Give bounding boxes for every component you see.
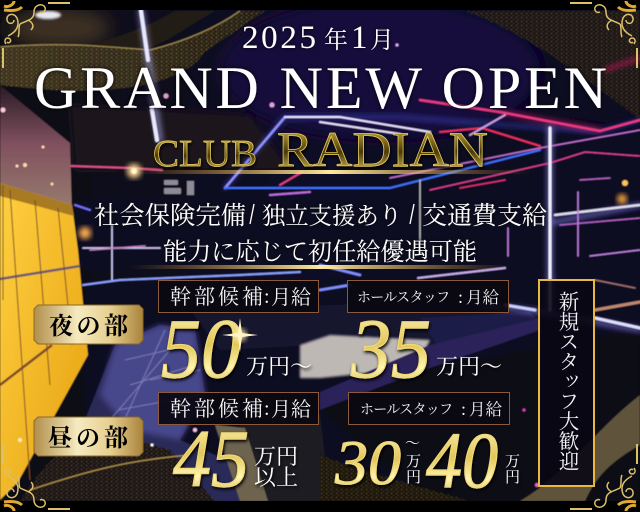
ornament top left (3, 1, 70, 68)
salary night staff: 万円〜 (436, 354, 502, 379)
date: 月 (370, 28, 394, 54)
label day: 昼の部 (48, 425, 128, 452)
box day executive: 幹部候補 (170, 397, 263, 421)
benefits text (94, 202, 547, 266)
salary day staff range: 円 (505, 469, 520, 486)
box day hall staff: : (461, 399, 466, 419)
salary day executive (173, 413, 298, 504)
box day executive: : (264, 398, 270, 420)
salary night staff (350, 302, 502, 396)
lower room (76, 200, 546, 270)
gold divider lower (130, 265, 510, 269)
date: 2025 (242, 20, 316, 56)
label day (34, 417, 143, 456)
amber top strip of wall (0, 183, 74, 216)
salary day staff range: 万 (505, 454, 520, 470)
box night executive: 幹部候補 (170, 285, 263, 309)
box night executive (158, 280, 318, 312)
sofa seat (190, 300, 530, 350)
salary night executive: 50 (161, 302, 241, 396)
sparkle (222, 318, 258, 352)
label night (34, 305, 143, 344)
club name logo: CLUB (153, 133, 257, 175)
box night executive: : (264, 286, 270, 308)
ornament bottom right (570, 444, 637, 511)
date: 年 (324, 27, 348, 54)
salary day executive: 万円 (254, 444, 298, 469)
ceiling band grey (70, 105, 290, 170)
neon lines (71, 11, 640, 330)
box night hall staff (348, 280, 508, 312)
marble floor (40, 325, 255, 501)
label night: 夜の部 (49, 313, 128, 340)
salary day executive: 以上 (254, 465, 298, 490)
ornament top right (570, 1, 637, 68)
ornament bottom left (3, 444, 70, 511)
box night hall staff: 月給 (466, 288, 500, 307)
glitter ribbon right (465, 11, 640, 120)
box day executive: 月給 (271, 398, 311, 421)
top black bar (0, 0, 640, 10)
gold wall (0, 183, 88, 500)
salary day staff range: 〜 (405, 436, 420, 452)
box night hall staff: ホールスタッフ (357, 290, 450, 306)
gold divider upper (130, 170, 530, 174)
benefits text: 独立支援あり (262, 203, 402, 230)
salary night executive (161, 302, 312, 396)
benefits text: 交通費支給 (422, 202, 547, 230)
box day hall staff: ホールスタッフ (360, 402, 453, 418)
date (242, 20, 394, 56)
lower floor dark with glitter (20, 430, 215, 501)
sofa right (320, 330, 640, 512)
benefits text: 社会保険完備 (94, 202, 246, 230)
box day hall staff: 月給 (469, 400, 502, 419)
salary day staff range: 30 (334, 427, 401, 498)
box night hall staff: : (458, 287, 463, 307)
date: 1 (351, 20, 368, 56)
black leather sofa bottom (240, 415, 330, 501)
salary day staff range (334, 418, 520, 505)
salary night executive: 万円〜 (246, 354, 312, 379)
salary day executive: 45 (173, 413, 249, 504)
wall seams (0, 185, 80, 480)
vertical welcome box: 新規スタッフ大歓迎 (555, 291, 579, 471)
salary day staff range: 円 (406, 469, 421, 486)
bottom black bar (0, 501, 640, 512)
box day hall staff (348, 392, 510, 424)
white table (300, 335, 430, 378)
club name logo (153, 121, 488, 177)
bottom right gold ribbon (520, 395, 640, 501)
box night executive: 月給 (271, 286, 311, 309)
club name logo: RADIAN (277, 121, 488, 177)
salary day staff range: 万 (406, 454, 421, 470)
ceiling fixture (164, 180, 194, 195)
salary day staff range: 40 (426, 418, 498, 505)
glow under spotlight (10, 8, 110, 48)
benefits text: 能力に応じて初任給優遇可能 (163, 238, 477, 266)
box day executive (158, 392, 318, 424)
ceiling glitter ribbon left (0, 11, 265, 91)
vertical welcome box (539, 280, 594, 486)
pink upper wall (0, 85, 72, 215)
title: GRAND NEW OPEN (34, 55, 607, 121)
ceiling spotlight (35, 11, 61, 19)
salary night staff: 35 (350, 302, 431, 396)
ceiling navy glow (220, 0, 540, 140)
